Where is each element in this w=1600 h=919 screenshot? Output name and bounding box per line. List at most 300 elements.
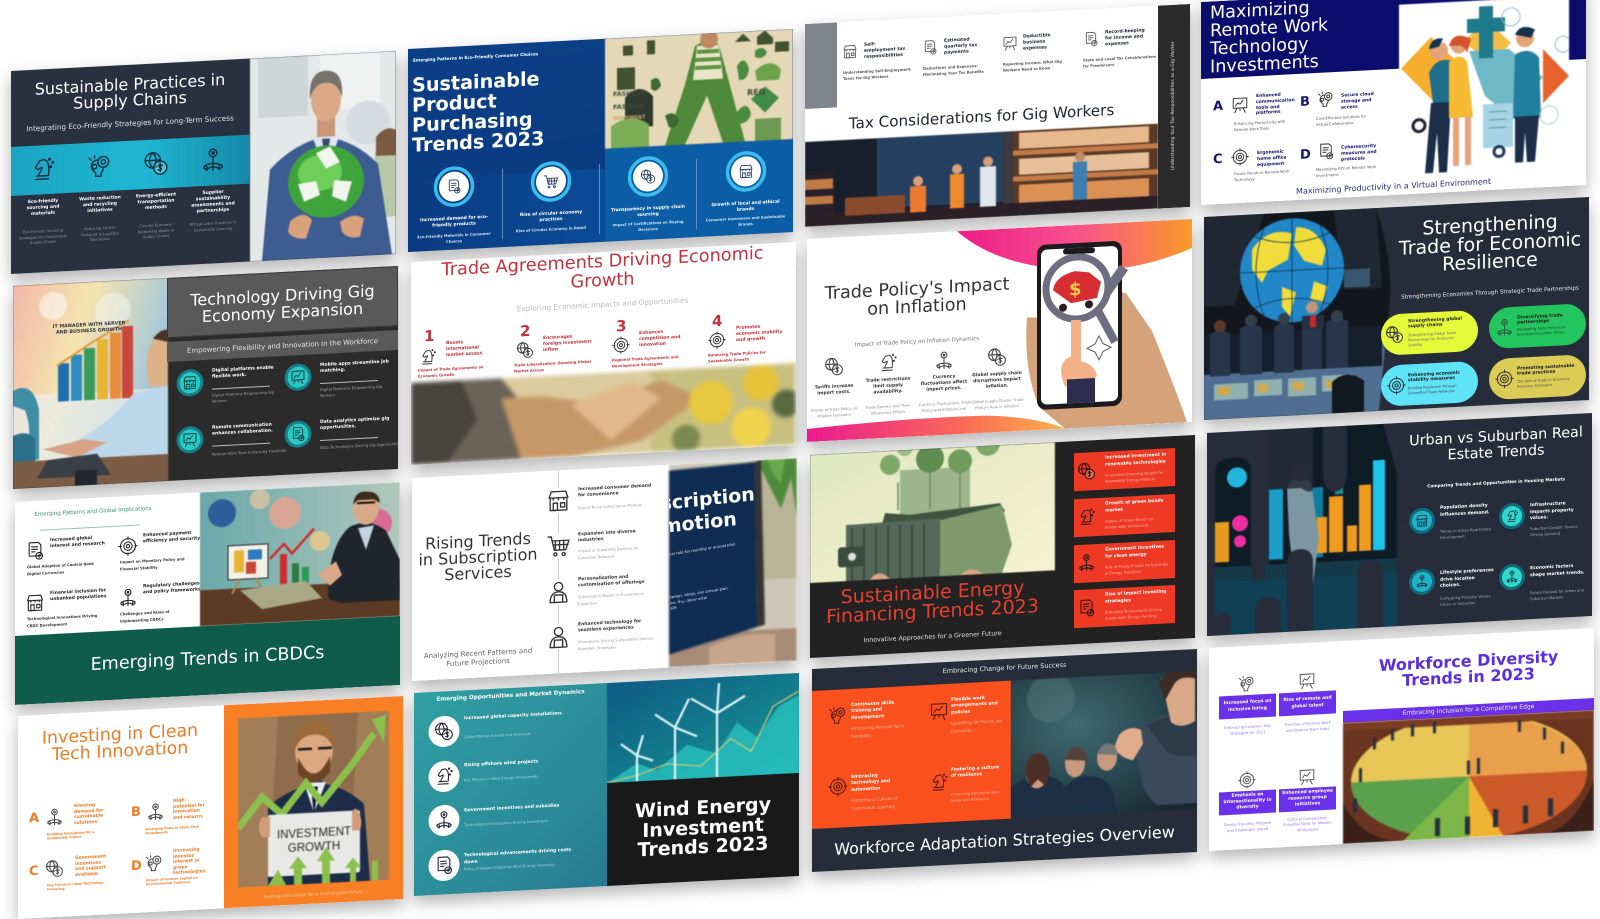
pill: supply chains: Strengthening Global Trade — [1408, 331, 1456, 337]
item: global interest — [25, 533, 113, 581]
item: technology: technology and — [851, 779, 890, 786]
item: regulatory — [118, 581, 198, 630]
item: record-keeping — [1083, 28, 1156, 68]
item: eco-friendly sourcing: Supply Chains — [30, 240, 56, 245]
item: resilience — [929, 765, 1009, 813]
item: regulatory: Regulatory challenges — [143, 581, 200, 589]
card: intersectionality: Gender Equality: Progress — [1224, 821, 1271, 827]
item: supplier sustainability: partnerships — [197, 208, 229, 214]
item: quarterly payments: payments — [944, 49, 969, 56]
panel: Workforce Adaptation Strategies Overview — [812, 649, 1197, 872]
item 4: brands — [737, 207, 754, 213]
footer text: Fueling Innovation for a Sustainable Future — [264, 890, 363, 900]
pill: diversifying: Navigating Trade Policies in — [1517, 325, 1565, 332]
card: green bonds — [1074, 494, 1175, 537]
item: eco-friendly sourcing: materials — [31, 211, 55, 217]
item B: access — [1341, 104, 1358, 110]
item: currency: Policy and Inflation Link — [922, 406, 966, 413]
item: remote communication — [176, 422, 286, 457]
pill: sustainable: The Role of Trade in Economic — [1517, 377, 1570, 384]
title — [1343, 647, 1594, 692]
title — [18, 721, 222, 766]
item D: Environmental Solutions — [146, 880, 190, 887]
card: inclusive hiring: Strategies for 2023 — [1230, 730, 1265, 736]
item: supply chain: Global Supply Chains: Trade — [972, 398, 1024, 404]
pill: diversifying — [1489, 303, 1586, 349]
item 3: Decisions — [638, 227, 658, 232]
eyebrow: Emerging Patterns and Global Implications — [34, 506, 152, 518]
item: skills: Continuous skills — [851, 701, 894, 708]
item A: Enhancing Productivity with — [1234, 120, 1285, 126]
subtitle — [412, 645, 544, 670]
title: Urban vs Suburban Real — [1409, 424, 1583, 449]
item: resilience: of resilience — [951, 773, 982, 779]
card: remote talent: The Rise of Remote Work — [1284, 721, 1331, 727]
panel: Tax Considerations for Gig Workers — [805, 4, 1190, 227]
item: deductible expenses: business — [1023, 40, 1045, 46]
illustration: eco fashion: FASHION — [613, 89, 645, 98]
card: resource groups: initiatives — [1295, 802, 1320, 808]
title: Trade for Economic — [1399, 228, 1581, 259]
eyebrow: Emerging Opportunities and Market Dynamics — [436, 689, 585, 703]
dark side stripe with vertical text — [1158, 4, 1190, 209]
item: financial inclusion: Technological Innovations Driving — [27, 614, 97, 621]
item: resilience: Enhancing Employee Well- — [951, 790, 1000, 797]
card: green bonds: Impact of Green Bonds on — [1105, 517, 1153, 524]
pill: stability: Diversified Trade Networks — [1408, 389, 1455, 395]
title: on Inflation — [867, 295, 967, 320]
laptop screen text — [669, 458, 797, 668]
item: currency: Currency Fluctuations, Trade — [919, 400, 972, 407]
photo: man holding green recycling globe — [249, 51, 396, 262]
item: self-employment: responsibilities — [864, 53, 903, 60]
card: intersectionality: and Challenges ahead — [1227, 827, 1268, 833]
item D: investor — [173, 853, 194, 860]
dark side stripe with vertical text: Understanding Your Tax Responsibilities as a Gig Worker — [1171, 41, 1176, 170]
item: energy-efficient transport: methods — [145, 205, 167, 211]
photo: green wallet with trees — [810, 442, 1055, 583]
item 1 — [418, 327, 484, 378]
item 3 — [611, 156, 685, 232]
item: supply chain — [972, 346, 1022, 413]
title: Trends in 2023 — [1402, 664, 1535, 690]
item: record-keeping: for income and — [1105, 34, 1143, 41]
item: quarterly payments — [923, 37, 984, 76]
item A — [29, 799, 119, 845]
photo: investor with growth sign — [238, 711, 389, 888]
item D: protocols — [1341, 156, 1365, 162]
card: government incentives: in Energy Transition — [1105, 570, 1141, 576]
card: intersectionality: intersectionality in — [1223, 798, 1272, 805]
title — [412, 530, 544, 585]
item: quarterly payments: Maximizing Your Tax Benefits — [923, 69, 984, 76]
item 3: Development Strategies — [612, 361, 663, 368]
title: Rising Trends — [425, 529, 531, 553]
item: technology — [828, 770, 908, 818]
item 1: Choices — [446, 239, 462, 244]
illustration: hand with phone and magnifier — [1026, 241, 1187, 428]
item 1: international — [446, 345, 479, 352]
item: financial inclusion: Financial inclusion for — [50, 588, 106, 596]
item: digital platforms — [176, 365, 274, 403]
item: global interest: Global Adoption of Central Bank — [27, 562, 94, 569]
item 2: practices — [539, 217, 563, 223]
purple band — [1343, 698, 1594, 723]
item: population density: Development — [1440, 535, 1465, 540]
item C: C — [1213, 152, 1223, 167]
item: currency: fluctuations affect — [921, 380, 967, 387]
card: renewable investment — [1074, 448, 1175, 491]
item: record-keeping: State and Local Tax Considerations — [1083, 55, 1156, 63]
subtitle: Exploring Economic Impacts and Opportunities — [517, 296, 688, 314]
item: waste reduction: initiatives — [87, 208, 113, 214]
laptop screen text: design, dergs, cler annual plan. — [669, 585, 729, 600]
illustration: eco fashion: FASHION — [613, 102, 645, 111]
item: lifestyle — [1408, 563, 1494, 610]
item: digital platforms: Digital Platforms Empowering Gig — [212, 390, 274, 398]
item A: A — [29, 811, 39, 826]
pill: sustainable: Recovery Strategies — [1517, 383, 1552, 389]
photo caption text: IT MANAGER WITH SERVER — [53, 321, 125, 330]
item: eco-friendly sourcing: sourcing and — [27, 204, 59, 211]
item: energy-efficient transport: transportation — [138, 198, 174, 205]
card: remote talent: global talent — [1291, 703, 1324, 709]
item C — [1213, 148, 1290, 182]
item 1: Eco-Friendly Materials in Consumer — [417, 232, 491, 240]
item: supplier sustainability: assessments and — [191, 201, 235, 209]
card: impact investing: Sustainable Energy Funding — [1105, 614, 1156, 621]
item: digital platforms: Workers — [212, 398, 227, 403]
subtitle: Impact of Trade Policy on Inflation Dynamics — [855, 336, 979, 349]
title: Supply Chains — [73, 87, 187, 112]
subtitle: Integrating Eco-Friendly Strategies for Long-Term Success — [26, 113, 234, 133]
item: supply chain: Global supply chain — [972, 371, 1022, 378]
item 4: Sustainable Growth — [708, 357, 749, 363]
item 1: market access — [446, 351, 482, 358]
panel: Maximizing Remote Work Technology Investments — [1201, 0, 1586, 205]
item A: Enhanced — [1256, 93, 1281, 99]
item 1: Impact of Trade Agreements on — [418, 365, 484, 373]
item A: tools and — [1256, 105, 1280, 111]
card: resource groups — [1279, 766, 1336, 831]
item: technology: Retention Strategies — [578, 645, 616, 651]
item 4: Promotes — [736, 325, 760, 331]
item: waste reduction — [79, 155, 121, 242]
item: technology: Policy Changes Impacting Wind Energy Financing — [464, 863, 555, 871]
panel: Trade Agreements Driving Economic Growth — [411, 242, 796, 465]
item: infrastructure: Driving Demand — [1530, 532, 1560, 537]
pill: sustainable: trade practices — [1517, 370, 1555, 377]
item 4: 4 — [712, 312, 722, 330]
item 4: economic stability — [736, 330, 782, 337]
item: waste reduction: Operations — [90, 237, 110, 242]
item D: D — [131, 859, 142, 874]
item: currency: import prices. — [926, 386, 962, 393]
photo in arch masks: man facing glowing bars — [1207, 423, 1402, 636]
item B: Investments — [146, 831, 168, 836]
card: renewable investment: Increased investment in — [1105, 452, 1166, 461]
item: economic factors: Suburban Markets — [1530, 595, 1564, 601]
item: payment efficiency: Impact on Monetary Policy and — [120, 557, 184, 565]
item D — [131, 846, 221, 893]
card: renewable investment: Renewable Energy Projects — [1105, 477, 1155, 484]
item: data analytics — [284, 416, 398, 450]
photo: crowd on colored circular floor — [1343, 710, 1594, 844]
item B: B — [1300, 94, 1310, 110]
item: restrictions — [866, 354, 910, 415]
item 3: Regional Trade Agreements and — [612, 355, 679, 363]
item 3 — [612, 317, 680, 368]
item: energy-efficient transport: Supply Chains — [143, 234, 169, 239]
item A: Growing — [74, 803, 95, 809]
black title panel: Wind Energy — [635, 793, 771, 823]
title: Resilience — [1442, 249, 1538, 276]
bottom band with title — [15, 616, 400, 705]
item: convenience — [546, 480, 668, 522]
item: convenience: Increased consumer demand — [578, 484, 651, 492]
item: eco-friendly sourcing: Eco-friendly — [28, 199, 58, 205]
title — [810, 577, 1055, 628]
photo: investor with growth sign: GROWTH — [288, 840, 340, 855]
item: capacity: Global Market Growth and Forecasts — [464, 732, 531, 739]
item: supply chain: disruptions impact — [973, 377, 1021, 384]
title: Purchasing — [412, 108, 533, 137]
item 4: Growth of local and ethical — [711, 200, 780, 208]
pill: diversifying: Diversifying trade — [1517, 313, 1563, 321]
item: quarterly payments: quarterly tax — [944, 43, 977, 50]
card: intersectionality: Emphasis on — [1232, 792, 1264, 799]
subtitle: Innovative Approaches for a Greener Future — [863, 630, 1002, 644]
panel: Urban vs Suburban Real Estate Trends — [1207, 413, 1592, 636]
item B — [131, 793, 221, 840]
item: financial inclusion: unbanked populations — [50, 594, 107, 602]
item: flexible — [929, 693, 1009, 741]
item: technology: Continuous Learning — [851, 805, 895, 812]
title — [35, 70, 225, 112]
item: incentives — [428, 796, 606, 837]
title: Trends 2023 — [412, 127, 544, 157]
item C: C — [29, 864, 39, 879]
item: capacity — [428, 707, 606, 748]
title block — [167, 266, 398, 338]
item: economic factors — [1498, 558, 1588, 605]
card: intersectionality: diversity — [1236, 805, 1259, 811]
item 4: and growth — [736, 337, 765, 343]
item: personalization: Expansion — [578, 601, 597, 606]
pill: supply chains — [1381, 310, 1478, 356]
item: offshore: Rising offshore wind projects — [464, 760, 538, 768]
item: offshore — [428, 752, 606, 793]
card: resource groups: Cultural Competence: — [1287, 816, 1328, 822]
item: diverse industries: Expansion into diverse — [578, 529, 636, 537]
item: regulatory: implementing CBDCs — [120, 617, 164, 623]
item: record-keeping: expenses — [1105, 41, 1129, 47]
item B: High — [173, 798, 185, 804]
item: diverse industries: Consumer Behavior — [578, 554, 614, 560]
card: remote talent — [1279, 670, 1336, 735]
item: deductible expenses: Deductible — [1023, 33, 1050, 40]
item: quarterly payments: Estimated — [944, 37, 970, 44]
item: personalization — [546, 571, 668, 613]
item: payment efficiency: Enhanced payment — [143, 531, 191, 538]
item 1: 1 — [424, 327, 434, 345]
item: waste reduction: Footprint in Logistics — [81, 231, 119, 237]
title — [1394, 211, 1586, 277]
item: self-employment — [843, 42, 911, 81]
item 1: friendly products — [432, 221, 476, 229]
item: remote communication: Remote Work Tools Enhancing Flexibility — [212, 449, 286, 457]
eyebrow: Emerging Patterns in Eco-Friendly Consumer Choices — [413, 51, 538, 63]
item: energy-efficient transport: Circular Economy: — [139, 223, 173, 228]
card: remote talent: Rise of remote and — [1283, 696, 1332, 703]
item: diverse industries: Impact of Streaming Services on — [578, 546, 638, 553]
subtitle band: Empowering Flexibility and Innovation in the Workforce — [187, 337, 378, 355]
item: mobile apps — [284, 359, 389, 398]
item: incentives: Government incentives and subsidies — [464, 803, 559, 813]
card: inclusive hiring — [1219, 674, 1276, 738]
item C: Government — [75, 854, 106, 861]
title: Trade Policy's Impact — [825, 274, 1009, 304]
item 4: Consumer Awareness and Sustainable — [706, 214, 785, 223]
panel: Trade Policy's Impact on Inflation — [807, 219, 1192, 442]
photo: laptop on subscription promotion — [669, 458, 797, 668]
item 1 — [417, 166, 491, 244]
pill: sustainable: Promoting sustainable — [1517, 364, 1574, 372]
title: Sustainable Energy — [841, 577, 1024, 608]
item: tariffs: Inflation Dynamics — [817, 412, 851, 418]
item C: Key Trends in Clean Technology — [47, 881, 104, 887]
photo: investor with growth sign: INVESTMENT — [277, 826, 351, 842]
item: energy-efficient transport: Energy-efficient — [136, 192, 176, 200]
item: skills — [828, 698, 908, 746]
item 4: Balancing Trade Policies for — [708, 351, 766, 358]
item 3: Enhances — [639, 330, 663, 336]
item: supplier sustainability — [190, 148, 236, 232]
item: lifestyle: drive location — [1440, 576, 1475, 582]
title — [1404, 424, 1588, 466]
item 2: Rise of circular economy — [520, 210, 582, 218]
card: renewable investment: renewable technologies — [1105, 459, 1166, 467]
teal band — [11, 135, 250, 196]
item A — [1213, 92, 1295, 132]
panel: Emerging Trends in CBDCs — [15, 482, 400, 705]
item: global interest: Increased global — [50, 536, 92, 543]
item: supplier sustainability: Supplier — [202, 190, 224, 196]
illustration: team handshake — [1399, 0, 1569, 175]
item D: interest in — [173, 859, 199, 865]
item: infrastructure: Suburban Growth: Factors — [1530, 525, 1578, 531]
item C: Technology — [1234, 177, 1255, 182]
title: Sustainable — [412, 67, 540, 97]
card: inclusive hiring: Increased focus on — [1224, 699, 1271, 706]
subtitle band — [167, 330, 398, 362]
item 2: foreign investment — [543, 340, 592, 347]
item: flexible: Demands — [951, 729, 971, 735]
item 2: Rise of Circular Economy in Retail — [516, 226, 586, 233]
black title panel: Investment — [642, 813, 764, 842]
item: mobile apps: Digital Platforms Empowering Gig — [320, 385, 382, 392]
item: currency — [919, 352, 972, 413]
panel: Wind Energy Investment Trends 2023 — [414, 673, 799, 896]
item A: sustainable — [74, 814, 103, 820]
panel: Investing in Clean Tech Innovation — [18, 696, 403, 919]
item: data analytics: opportunities. — [320, 424, 356, 431]
title: Tax Considerations for Gig Workers — [849, 101, 1114, 133]
pill: supply chains: Stability — [1408, 342, 1422, 347]
photo: wind turbines and growth lines — [607, 673, 799, 783]
item: infrastructure — [1498, 497, 1588, 544]
item: convenience: Rise of Niche Subscription Markets — [578, 503, 642, 510]
item: mobile apps: Workers — [320, 393, 335, 398]
pill: stability — [1381, 361, 1478, 407]
item D: Increasing — [173, 848, 200, 854]
item: restrictions: availability. — [873, 389, 903, 396]
item: personalization: customization of offerings — [578, 580, 645, 588]
item: self-employment: Taxes for Gig Workers — [843, 74, 888, 81]
item D: Impact of Venture Capital on — [146, 876, 198, 882]
item B: innovation — [173, 809, 200, 815]
item 3: Transparency in supply chain — [611, 205, 685, 213]
item: record-keeping: for Freelancers — [1083, 63, 1114, 68]
item: technology: automation — [851, 786, 880, 793]
item: digital platforms: flexible work. — [212, 373, 246, 380]
card: resource groups: resource group — [1288, 795, 1327, 802]
pill: stability: stability measures — [1408, 376, 1455, 384]
title: in Subscription — [418, 544, 538, 570]
item: regulatory: and policy frameworks — [143, 587, 201, 595]
pill: diversifying: Uncertain Economic Times — [1517, 330, 1564, 337]
item: capacity: Increased global capacity installations — [464, 711, 562, 721]
item: mobile apps: Mobile apps streamline job — [320, 359, 389, 368]
item C: equipment — [1257, 161, 1284, 168]
item C: available — [75, 872, 98, 878]
item: economic factors: Future Outlook for Urban and — [1530, 588, 1584, 595]
title: Workforce Diversity — [1379, 647, 1558, 675]
item: payment efficiency — [118, 528, 198, 577]
item: data analytics: Data analytics optimize gig — [320, 416, 389, 425]
orange panel — [812, 681, 1011, 829]
item: currency: Currency — [933, 374, 955, 380]
card: renewable investment: Innovative Financing Models for — [1105, 471, 1164, 478]
title: Technology — [1210, 34, 1309, 60]
item: technology: Enhanced technology for — [578, 619, 641, 627]
item 3: Impact of Certifications on Buying — [613, 220, 683, 227]
card: government incentives: for clean energy — [1105, 552, 1147, 559]
item: waste reduction: and recycling — [83, 201, 117, 208]
card: inclusive hiring: inclusive hiring — [1228, 706, 1267, 713]
pill: stability: Building Resilience Through — [1408, 384, 1457, 390]
subtitle: Strengthening Economies Through Strategic Trade Partnerships — [1401, 286, 1579, 301]
item: remote communication: Remote communication — [212, 423, 272, 431]
item A: communication — [1256, 98, 1295, 105]
laptop screen text: ins, thu, decar artal — [670, 594, 707, 605]
item C: Financing — [47, 887, 64, 892]
item: lifestyle: Urban vs Suburban — [1440, 601, 1475, 607]
item: global interest: Digital Currencies — [27, 570, 64, 576]
photo: IT manager with growth chart — [13, 278, 169, 489]
panel: Sustainable Energy Financing Trends 2023 — [810, 435, 1195, 658]
item: deductible expenses: Reporting Income: What Gig — [1003, 60, 1062, 67]
subtitle: Future Projections — [446, 656, 510, 668]
card: intersectionality — [1219, 770, 1276, 834]
panel: Workforce Diversity Trends in 2023 — [1209, 628, 1594, 851]
item: financial inclusion — [25, 586, 113, 634]
item B: potential for — [173, 803, 205, 810]
item: tariffs: Tariffs increase — [815, 384, 853, 391]
card: government incentives — [1074, 540, 1175, 583]
item: supply chain: inflation. — [986, 384, 1008, 390]
item B: Secure cloud — [1341, 92, 1374, 99]
